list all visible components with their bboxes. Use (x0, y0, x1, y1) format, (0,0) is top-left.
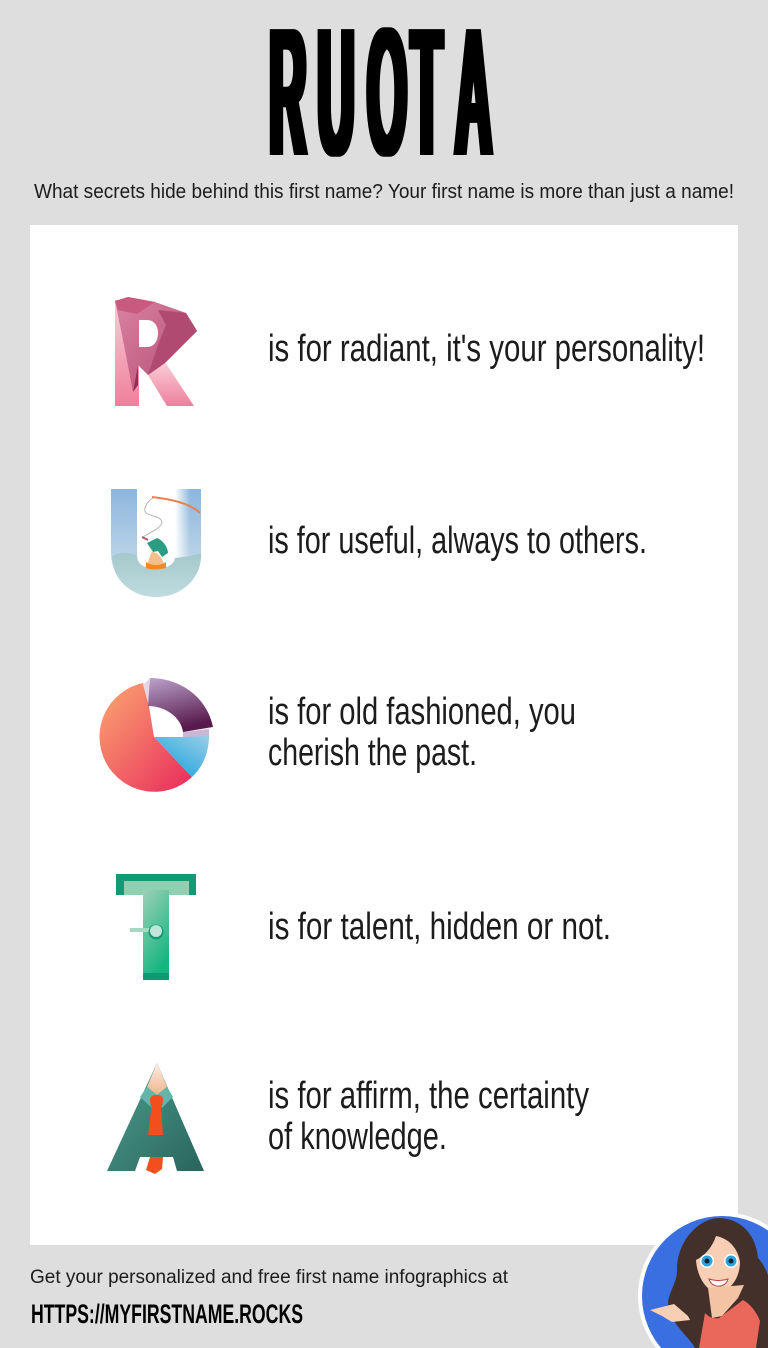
panel: letters (30, 225, 738, 1245)
icon: letter T door (116, 874, 196, 980)
icon: letter A with tie (107, 1063, 204, 1174)
icon: pie letter O (99, 678, 213, 792)
footer url: HTTPS://MYFIRSTNAME.ROCKS (31, 1299, 303, 1329)
row 3 text: cherish the past. (268, 732, 477, 774)
row 5 text: of knowledge. (268, 1116, 447, 1158)
subtitle: What secrets hide behind this first name? Your first name is more than just a name! (34, 181, 734, 203)
row 5 text (268, 1075, 589, 1158)
row 5 text: is for affirm, the certainty (268, 1075, 589, 1117)
avatar (638, 1212, 768, 1348)
row 4 text: is for talent, hidden or not. (268, 906, 611, 948)
icon: letter U with fisherman (111, 489, 201, 597)
icon: letter R with gem (115, 297, 197, 406)
row 3 text (268, 691, 576, 774)
row 2 text: is for useful, always to others. (268, 520, 647, 562)
footer text: Get your personalized and free first name infographics at (30, 1267, 509, 1288)
row 3 text: is for old fashioned, you (268, 691, 576, 733)
